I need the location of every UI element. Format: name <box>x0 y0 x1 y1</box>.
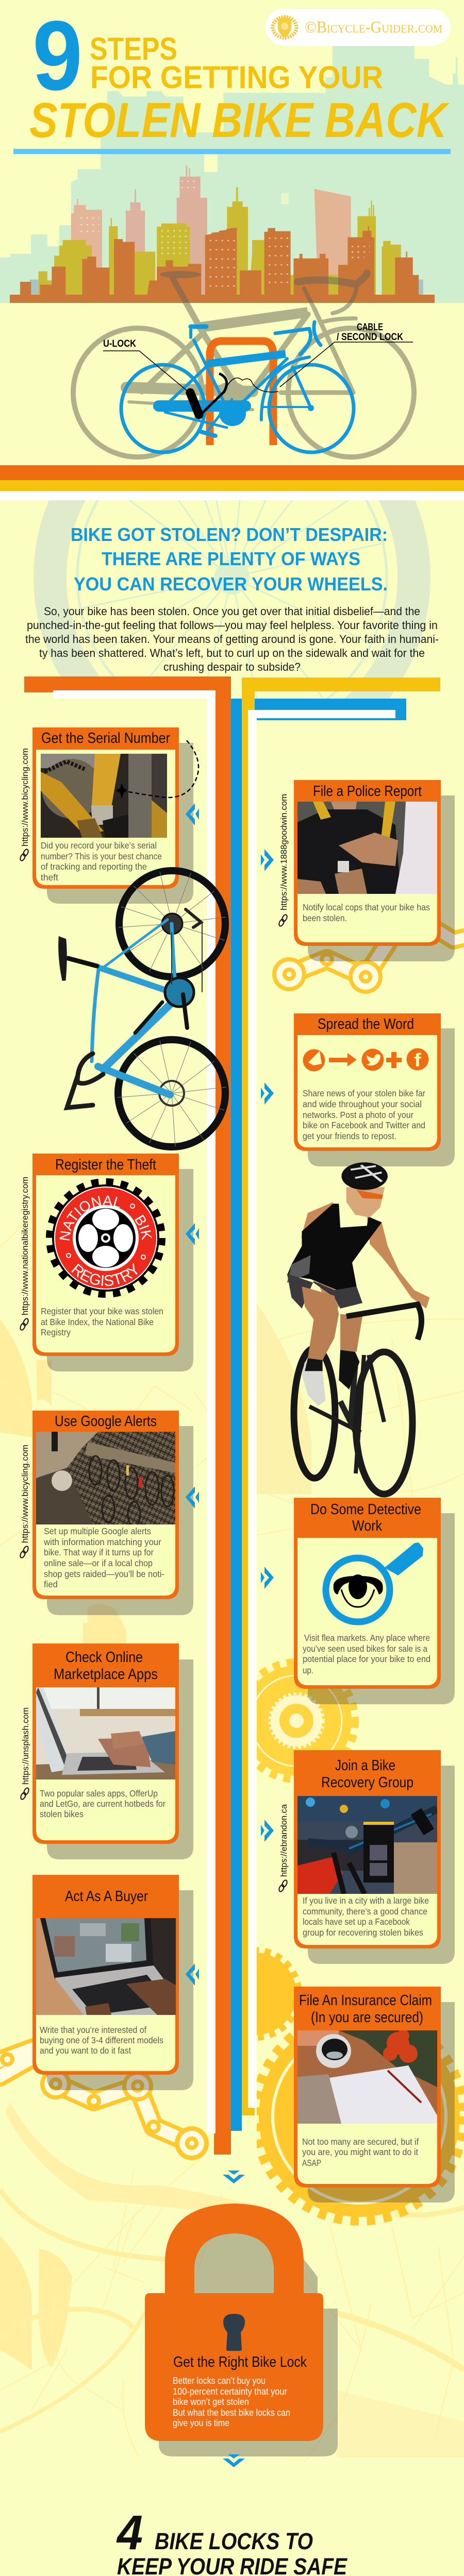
body text: Register that your bike was stolen <box>41 1306 163 1316</box>
rear and front wheels <box>294 1348 412 1494</box>
lock shadow <box>159 2218 338 2456</box>
frame <box>92 920 178 1095</box>
body text <box>303 1088 425 1141</box>
body text: fied <box>44 1579 58 1589</box>
body text: theft <box>41 872 58 883</box>
body text: Notify local cops that your bike has <box>303 902 430 912</box>
photo: laptop typing <box>36 1687 175 1780</box>
body text <box>40 1788 165 1819</box>
heading: Work <box>352 1518 382 1534</box>
rear wheel <box>119 871 226 977</box>
body text: But what the best bike locks can <box>173 2408 290 2418</box>
source link: unsplash: https://unsplash.com <box>21 1707 30 1785</box>
rider body <box>287 1162 429 1406</box>
body text: and wide throughout your social <box>303 1099 422 1109</box>
intro paragraph <box>25 605 439 673</box>
handlebar <box>346 1304 422 1340</box>
heading: 4 bike locks: BIKE LOCKS TO <box>155 2528 313 2554</box>
panel: do some detective work <box>294 1498 455 1704</box>
chevron right <box>261 849 274 871</box>
photo: browsing on a laptop <box>36 1918 176 2015</box>
intro heading <box>71 524 388 595</box>
body text: 100-percent certainty that your <box>173 2386 287 2397</box>
heading: 4 bike locks: 4 <box>116 2505 143 2560</box>
chevron left <box>186 803 199 825</box>
intro heading: THERE ARE PLENTY OF WAYS <box>102 548 360 569</box>
body text: been stolen. <box>303 913 347 923</box>
body text <box>41 840 162 883</box>
intro wheel background <box>34 500 430 699</box>
panel: spread the word <box>294 1013 455 1166</box>
panel: use google alerts <box>32 1411 193 1615</box>
shackle <box>165 2204 304 2293</box>
blue locked bike <box>121 322 354 452</box>
body text: If you live in a city with a large bike <box>303 1895 429 1906</box>
heading: File An Insurance Claim <box>299 1992 432 2009</box>
body text: Registry <box>41 1327 71 1337</box>
cable lock callout: CABLE <box>357 322 383 333</box>
source link: 1888goodwin: https://www.1888goodwin.com <box>279 794 289 910</box>
panel: join a bike recovery group <box>294 1750 455 1964</box>
source link: bicycling: https://www.bicycling.com <box>20 748 30 846</box>
body text: buying one of 3-4 different models <box>40 2035 163 2045</box>
logo: national bike registry <box>46 1178 165 1298</box>
heading: Spread the Word <box>318 1016 414 1032</box>
heading: Marketplace Apps <box>54 1666 158 1683</box>
body text: stolen bikes <box>40 1809 84 1819</box>
body text: give you is time <box>173 2418 229 2428</box>
body text: community, there’s a good chance <box>303 1906 427 1917</box>
chevron right <box>261 1082 274 1105</box>
chevron left <box>186 1963 199 1986</box>
body text: number? This is your best chance <box>41 851 162 861</box>
header city skyline <box>0 46 464 303</box>
u-lock callout: U-LOCK <box>103 338 136 349</box>
body text: Two popular sales apps, OfferUp <box>40 1788 158 1799</box>
yellow chain upper right <box>272 927 464 994</box>
logo: national bike registry: NATIONAL <box>60 1195 120 1241</box>
intro paragraph: the world has been taken. Your means of getting around is gone. Your faith in humani- <box>25 633 439 646</box>
heading: (In you are secured) <box>311 2009 423 2026</box>
photo: tag on handlebars <box>297 1796 437 1894</box>
body text: Not too many are secured, but if <box>302 2137 419 2147</box>
intro paragraph: punched-in-the-gut feeling that follows—you may feel helpless. Your favorite thing in <box>27 619 438 632</box>
heading: Join a Bike <box>335 1757 395 1774</box>
map background <box>0 1216 464 2463</box>
panel: file a police report <box>294 780 455 961</box>
panel: register the theft <box>32 1154 193 1371</box>
title: STEPS <box>90 31 177 67</box>
body text: you’ve seen used bikes for sale is a <box>303 1643 427 1654</box>
heading <box>321 1757 413 1791</box>
source link: nationalbikeregistry: https://www.nationalbikeregistry.com <box>20 1177 30 1315</box>
body text: bike won’t get stolen <box>173 2397 249 2407</box>
heading <box>299 1992 432 2026</box>
panel: file an insurance claim <box>294 1987 455 2202</box>
ghost bike <box>73 271 414 457</box>
body text: online sale—or if a local chop <box>44 1558 153 1568</box>
heading: Recovery Group <box>321 1774 413 1791</box>
chevron down <box>223 2454 245 2467</box>
body text <box>303 1895 429 1938</box>
body text: locals have set up a Facebook <box>303 1917 410 1927</box>
body text <box>43 1526 164 1589</box>
source link: ebrandon: https://ebrandon.ca <box>279 1804 289 1877</box>
gear large behind insurance card <box>257 1947 464 2226</box>
intro heading: BIKE GOT STOLEN? DON’T DESPAIR: <box>71 524 388 545</box>
photo: coffee, paper and pen <box>297 2030 437 2124</box>
icons: megaphone, twitter, facebook: f <box>414 1049 422 1071</box>
body text <box>302 2137 419 2168</box>
panel: check online marketplace apps <box>32 1643 193 1859</box>
body text: Did you record your bike’s serial <box>41 840 157 851</box>
dashed pointer to serial number <box>115 740 198 799</box>
body text: networks. Post a photo of your <box>303 1110 413 1120</box>
body text: group for recovering stolen bikes <box>303 1927 423 1938</box>
photo: serial number on frame <box>41 754 167 838</box>
heading: Act As A Buyer <box>65 1888 148 1905</box>
cable lock callout: / SECOND LOCK <box>337 332 403 343</box>
body text: with information matching your <box>43 1537 161 1547</box>
orange and yellow band <box>0 465 464 500</box>
body text: get your friends to repost. <box>303 1131 396 1141</box>
timeline rails <box>24 676 440 2155</box>
panel: padlock get the right bike lock <box>145 2204 338 2456</box>
body text <box>173 2376 290 2428</box>
blue divider <box>13 149 451 154</box>
body text: ASAP <box>302 2158 321 2168</box>
heading: Get the Right Bike Lock <box>173 2354 307 2370</box>
body text: and LetGo, are current hotbeds for <box>40 1799 165 1809</box>
panel: get the serial number <box>32 727 193 904</box>
cyclist photo illustration <box>287 1162 429 1494</box>
bike rack <box>210 341 273 445</box>
body text: and you want to do it fast <box>40 2045 131 2056</box>
body text <box>303 1633 430 1675</box>
body text: shop gets raided—you’ll be noti- <box>44 1569 164 1579</box>
top logo badge: ©Bicycle-Guider.com <box>305 18 442 36</box>
u-lock callout <box>103 338 227 415</box>
heading: File a Police Report <box>313 783 422 800</box>
panel: act as a buyer <box>32 1875 193 2090</box>
title <box>29 0 450 148</box>
body text <box>41 1306 163 1337</box>
intro paragraph: crushing despair to subside? <box>163 660 301 673</box>
handlebars <box>67 1054 103 1108</box>
photo: police officer <box>297 802 437 894</box>
body text: bike. That way if it turns up for <box>44 1547 154 1557</box>
body text: Write that you’re interested of <box>40 2025 146 2035</box>
body text <box>303 902 430 923</box>
faded padlock behind cards <box>83 1604 126 1643</box>
icons: megaphone, twitter, facebook <box>303 1048 429 1072</box>
body text: Share news of your stolen bike far <box>303 1088 425 1098</box>
heading <box>310 1501 421 1534</box>
chevron down <box>223 2171 245 2183</box>
body text: potential place for your bike to end <box>303 1654 430 1664</box>
chevron left <box>186 1223 199 1245</box>
heading <box>54 1649 158 1683</box>
front wheel <box>118 1040 226 1147</box>
chevron left <box>186 1486 199 1509</box>
photo: stolen bikes warehouse <box>36 1432 175 1524</box>
logo: national bike registry: REGISTRY <box>71 1263 138 1286</box>
heading: Register the Theft <box>55 1157 156 1173</box>
yellow chain lower left <box>0 2040 209 2160</box>
body text <box>40 2025 163 2056</box>
heading: Get the Serial Number <box>41 730 170 747</box>
top logo badge <box>266 9 451 46</box>
source link: bicycling: https://www.bicycling.com <box>20 1445 30 1543</box>
body text: Better locks can’t buy you <box>173 2376 266 2386</box>
body text: at Bike Index, the National Bike <box>41 1317 154 1327</box>
body text: of tracking and reporting the <box>41 861 147 872</box>
number 9: 9 <box>32 0 82 111</box>
body text: Visit flea markets. Any place where <box>304 1633 430 1643</box>
heading: 4 bike locks <box>116 2505 348 2576</box>
chevron right <box>261 1567 274 1589</box>
title: FOR GETTING YOUR <box>90 60 383 95</box>
intro heading: YOU CAN RECOVER YOUR WHEELS. <box>74 573 388 595</box>
gear small <box>257 1658 359 1783</box>
body text: up. <box>303 1665 313 1675</box>
body text: bike on Facebook and Twitter and <box>303 1120 425 1130</box>
intro paragraph: ty has been shattered. What’s left, but to curl up on the sidewalk and wait for the <box>39 647 425 659</box>
body text: you are, you might want to do it <box>302 2147 418 2157</box>
heading: Do Some Detective <box>310 1501 421 1518</box>
vertical bike photo illustration <box>60 871 226 1147</box>
heading: Use Google Alerts <box>55 1413 157 1430</box>
heading: Check Online <box>65 1649 143 1666</box>
saddle and post <box>60 939 97 980</box>
header ground strip <box>10 295 435 303</box>
keyhole <box>223 2314 245 2351</box>
chevron right <box>261 1820 274 1842</box>
lock body <box>145 2293 323 2441</box>
intro paragraph: So, your bike has been stolen. Once you get over that initial disbelief—and the <box>44 605 420 618</box>
cable lock callout <box>227 322 413 392</box>
icon: magnifier with eye <box>326 1543 423 1622</box>
body text: Set up multiple Google alerts <box>44 1526 151 1536</box>
crank and chainring <box>165 922 202 1028</box>
